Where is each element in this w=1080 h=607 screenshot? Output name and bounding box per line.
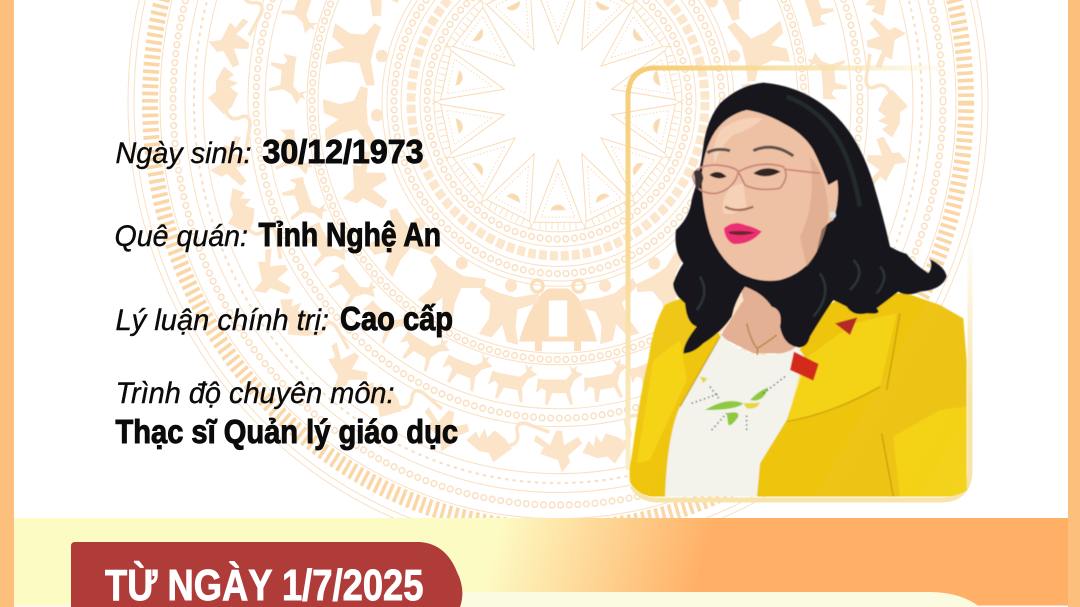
info: political theory <box>116 300 453 337</box>
info: political theory: Cao cấp <box>340 300 453 337</box>
face <box>702 110 838 281</box>
info: hometown: Tỉnh Nghệ An <box>258 216 441 253</box>
info: political theory: Lý luận chính trị: <box>116 304 329 337</box>
eyes <box>709 168 781 178</box>
info: date of birth: 30/12/1973 <box>262 133 424 170</box>
portrait frame <box>628 68 970 500</box>
info: qualification: Trình độ chuyên môn: <box>116 377 394 410</box>
hair curls <box>697 260 884 317</box>
bottom gradient band <box>14 518 1068 607</box>
white blouse <box>663 335 807 500</box>
right page border <box>1068 0 1080 607</box>
pale content panel <box>440 592 980 607</box>
white strip <box>14 606 1068 607</box>
nose <box>725 207 753 210</box>
eyebrows <box>707 147 793 156</box>
left page border <box>0 0 14 607</box>
info: qualification: Thạc sĩ Quản lý giáo dục <box>116 413 458 450</box>
necklace <box>747 323 777 355</box>
lips <box>724 223 762 244</box>
portrait photo <box>630 83 967 500</box>
info: date of birth <box>116 133 424 170</box>
neck and chest <box>719 286 796 354</box>
date tab <box>71 542 462 607</box>
info: qualification <box>116 377 458 450</box>
delegate badge <box>790 352 819 381</box>
info: hometown <box>114 216 441 253</box>
yellow jacket <box>630 298 720 500</box>
background: bronze drum motif <box>128 0 988 552</box>
glasses <box>693 164 820 193</box>
info: hometown: Quê quán: <box>114 220 248 253</box>
earring <box>829 212 836 218</box>
hair <box>673 83 947 353</box>
jacket highlight <box>637 313 967 500</box>
blouse embroidery <box>705 387 768 425</box>
info: date of birth: Ngày sinh: <box>116 137 252 170</box>
